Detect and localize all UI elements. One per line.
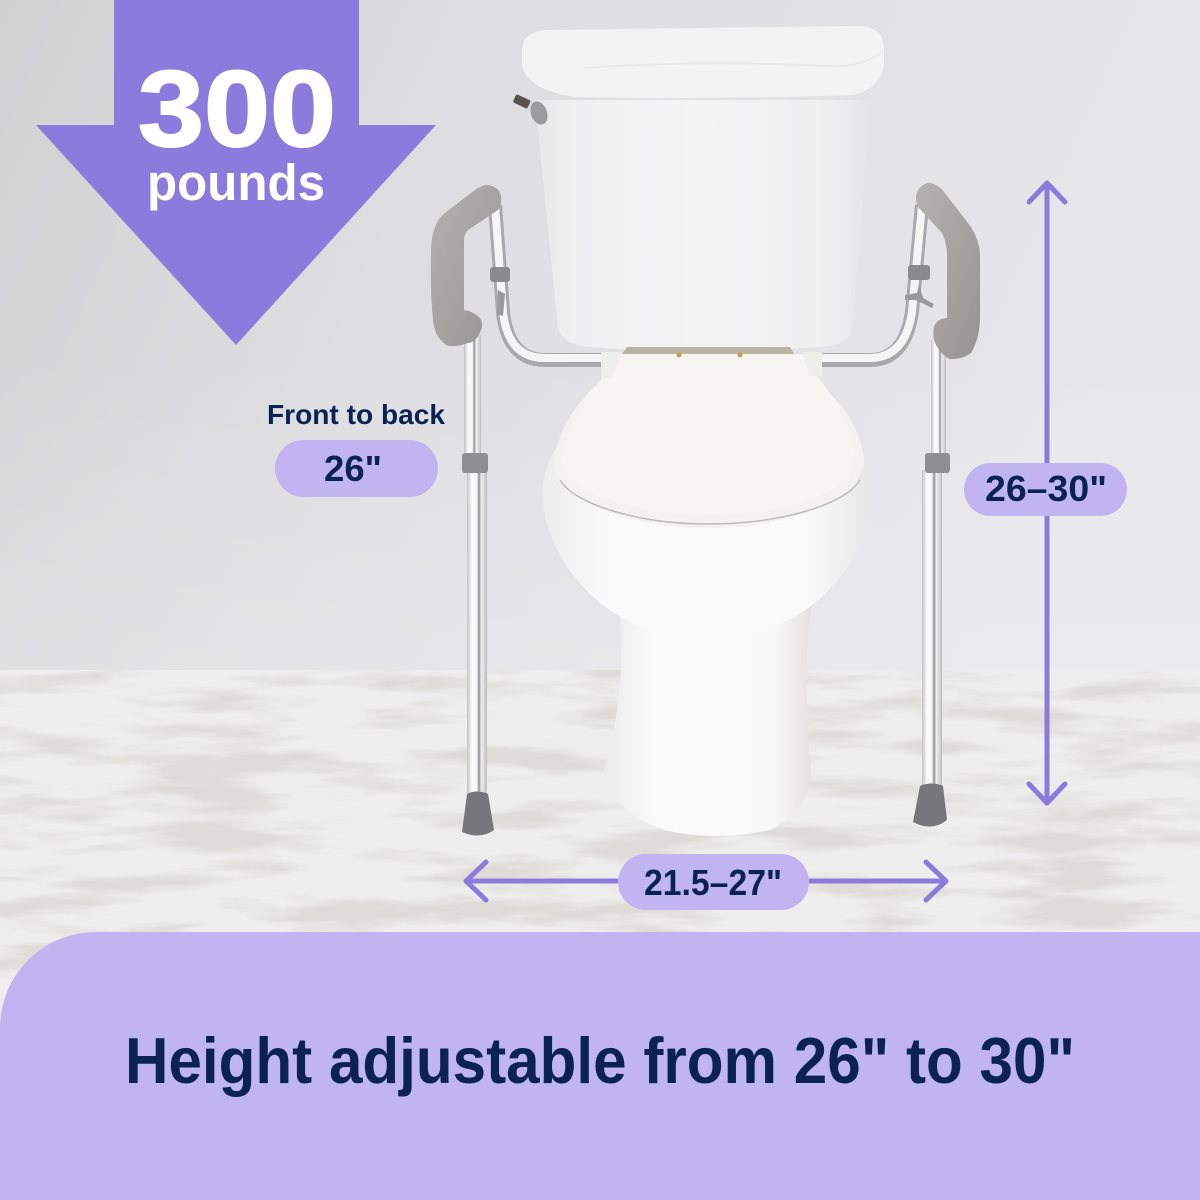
right upper bar (822, 205, 922, 360)
weight value: 300 (138, 48, 336, 169)
right leg (931, 340, 946, 455)
flush handle (513, 94, 551, 127)
right rubber foot (913, 784, 947, 827)
toilet tank (535, 100, 871, 352)
left upper bar (495, 205, 602, 360)
front to back label: Front to back (267, 399, 445, 430)
height pill (964, 463, 1127, 516)
seat brackets (601, 352, 822, 378)
seat lid (562, 354, 855, 514)
hinge strip (622, 347, 794, 358)
height pill: 26–30" (985, 468, 1107, 509)
headline: Height adjustable from 26" to 30" (125, 1024, 1075, 1097)
weight capacity arrow (36, 0, 436, 345)
front to back dimension (267, 399, 445, 497)
left arm pad (431, 185, 501, 346)
left rubber foot (462, 792, 494, 836)
front to back pill (275, 440, 438, 497)
width pill (618, 854, 809, 910)
tank lid (522, 26, 884, 98)
left clamp (490, 267, 510, 316)
right arm pad (916, 183, 980, 359)
right clamp (905, 265, 934, 308)
toilet (513, 26, 884, 836)
width pill: 21.5–27" (644, 862, 782, 903)
wall background (0, 0, 1200, 672)
marble floor (0, 670, 1200, 1200)
safety frame (431, 183, 980, 836)
pedestal (604, 590, 814, 836)
height dimension arrow (964, 183, 1127, 803)
front to back pill: 26" (324, 448, 382, 489)
width dimension arrow (466, 854, 946, 910)
weight unit: pounds (147, 154, 325, 211)
left leg (464, 335, 481, 455)
bowl (542, 415, 873, 640)
bottom banner (0, 932, 1200, 1200)
seat ring (555, 375, 864, 528)
